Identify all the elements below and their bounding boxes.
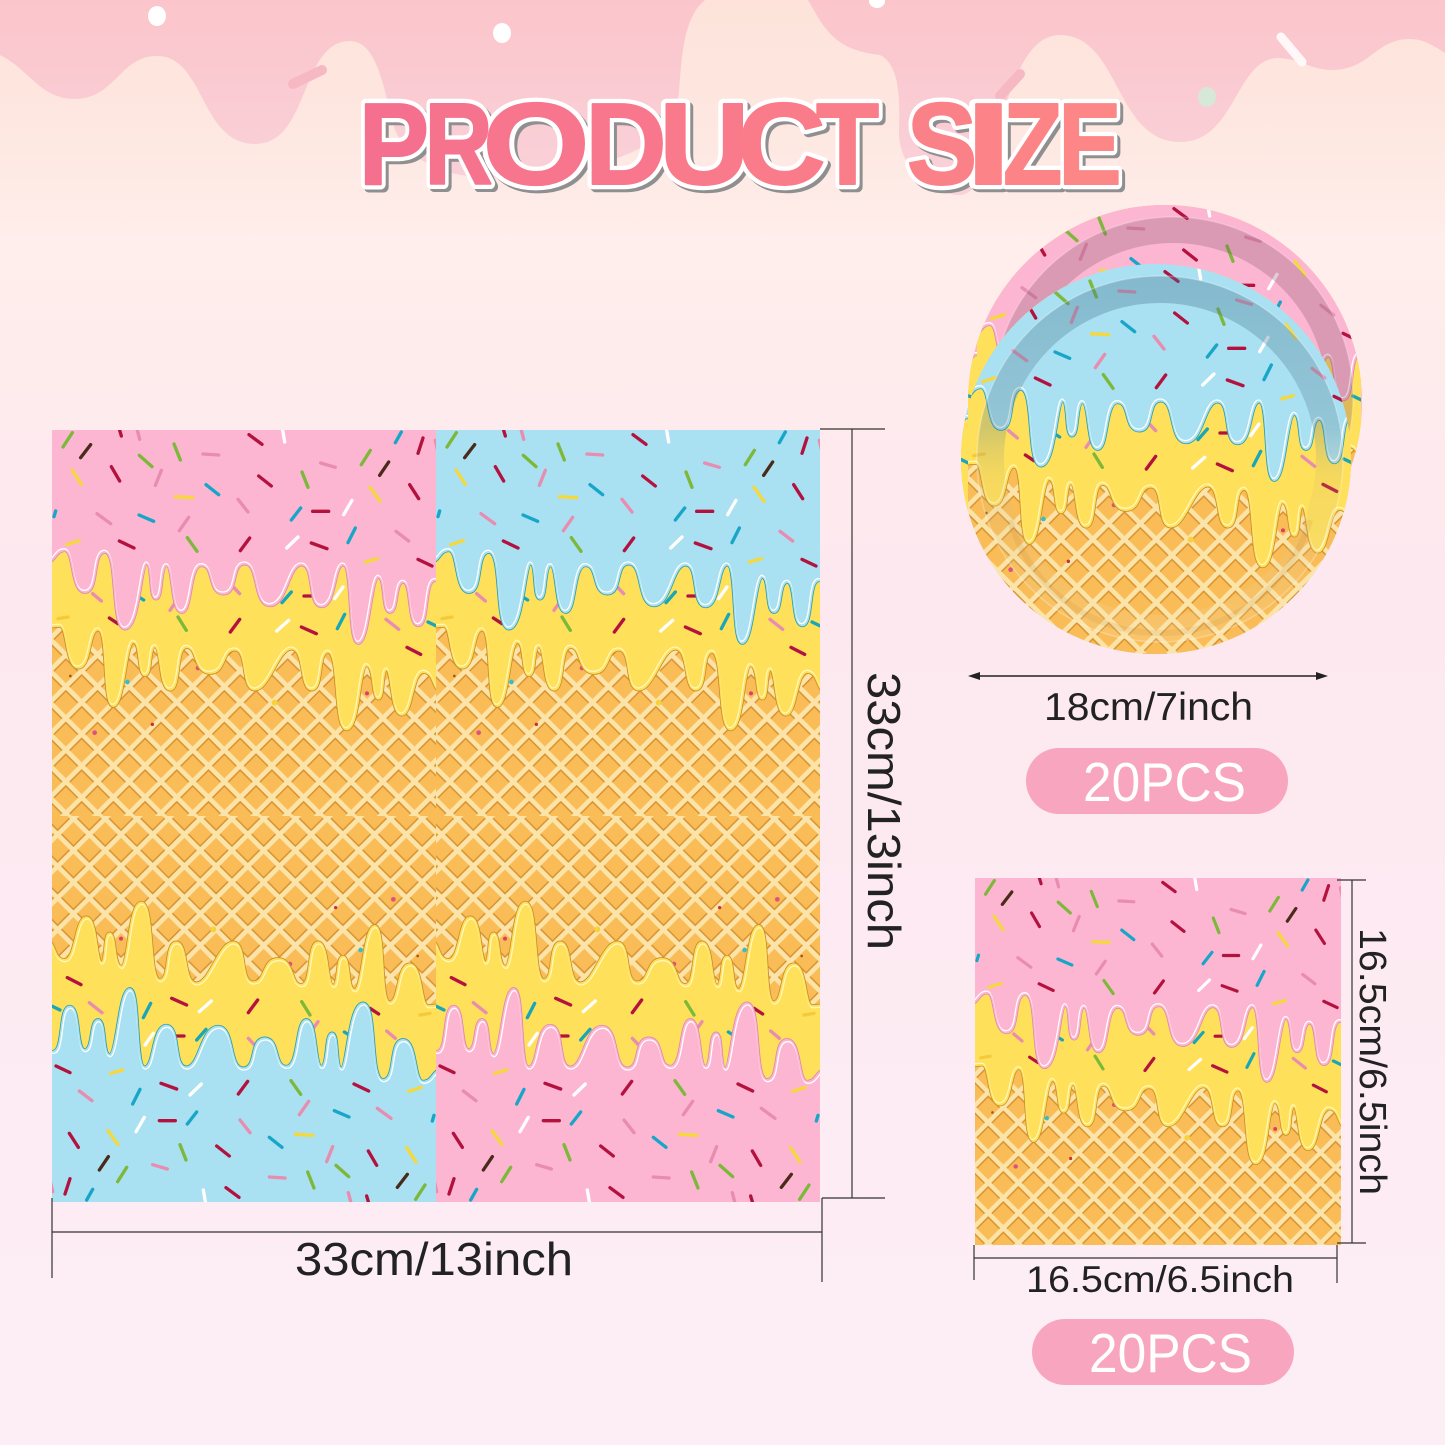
large napkin height dimension: 33cm/13inch: [858, 672, 910, 950]
title: PRODUCT SIZE: O: [482, 80, 590, 210]
small napkin height dimension: 16.5cm/6.5inch: [1351, 928, 1393, 1195]
title: PRODUCT SIZE: S: [907, 78, 977, 209]
small folded napkin: [969, 870, 1348, 1246]
title: PRODUCT SIZE: [359, 78, 1125, 213]
title: PRODUCT SIZE: I: [965, 79, 1012, 209]
title: PRODUCT SIZE: P: [359, 78, 429, 209]
large napkin width dimension: 33cm/13inch: [295, 1233, 573, 1285]
small napkin height dimension: [1337, 880, 1393, 1243]
plate quantity pill: 20PCS: [1083, 751, 1246, 813]
large napkin height dimension: [820, 429, 910, 1198]
plate quantity pill: [1026, 748, 1288, 814]
plate diameter dimension with double arrow: 18cm/7inch: [1044, 686, 1253, 729]
napkin quantity pill: [1032, 1319, 1294, 1385]
small napkin width dimension: [974, 1245, 1337, 1300]
title: PRODUCT SIZE: C: [737, 80, 826, 209]
large napkin unfolded: four tiles: [45, 422, 827, 1210]
large napkin width dimension: [52, 1198, 822, 1285]
top icing drip decoration: [0, 0, 1445, 195]
title: PRODUCT SIZE: U: [659, 79, 750, 209]
title: PRODUCT SIZE: E: [1058, 80, 1122, 209]
front plate: blue: [961, 264, 1351, 654]
title: PRODUCT SIZE: D: [585, 80, 667, 209]
title: PRODUCT SIZE: Z: [1003, 79, 1062, 209]
napkin quantity pill: 20PCS: [1089, 1322, 1252, 1384]
back plate: pink: [968, 205, 1362, 466]
title: PRODUCT SIZE: R: [424, 80, 493, 209]
title: PRODUCT SIZE: T: [816, 79, 879, 209]
small napkin width dimension: 16.5cm/6.5inch: [1026, 1259, 1294, 1300]
plate diameter dimension with double arrow: [968, 672, 1328, 729]
